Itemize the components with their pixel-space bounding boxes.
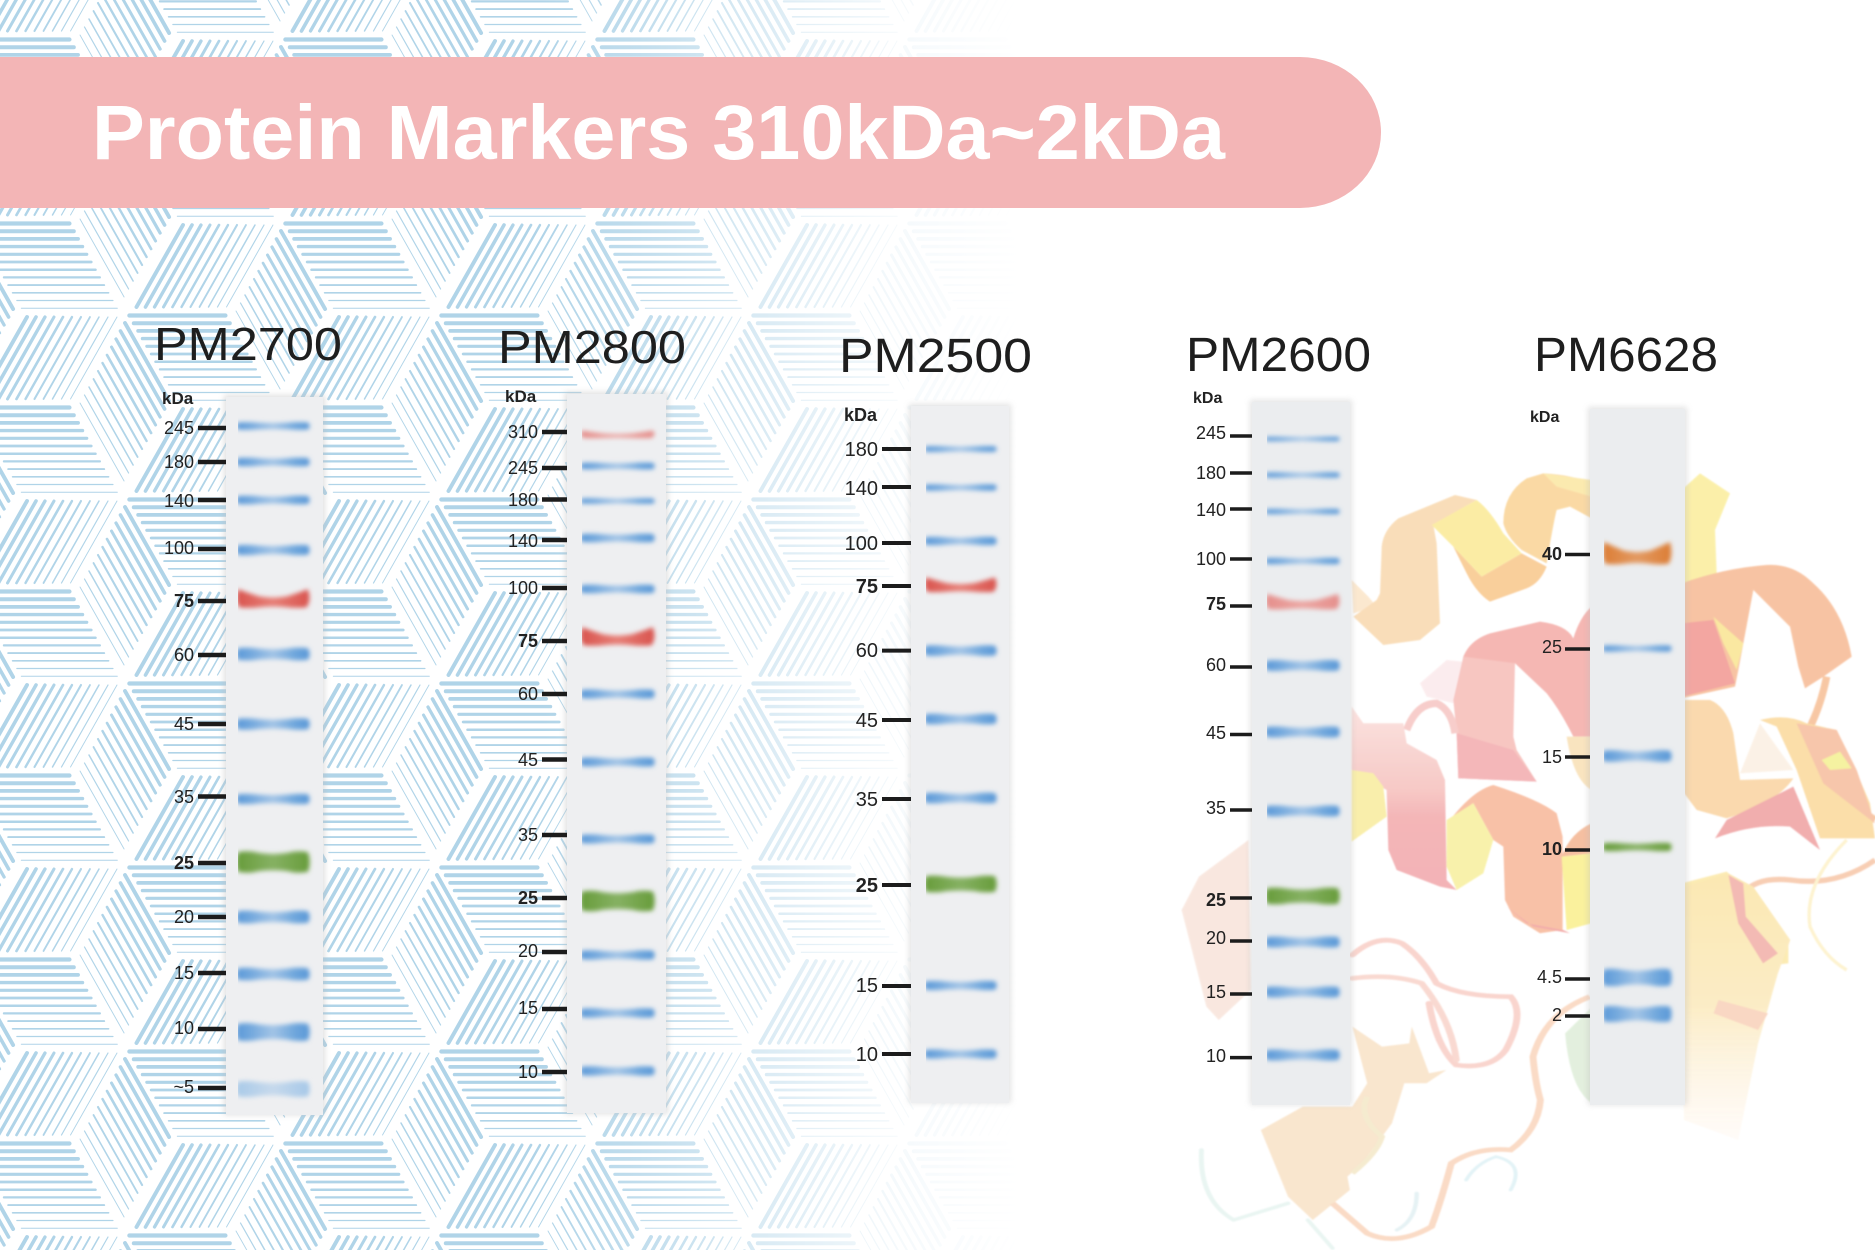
- size labels PM2800: 10: [518, 1062, 538, 1082]
- panel: PM2700 ladder: [154, 318, 342, 1115]
- size labels PM2600: 25: [1206, 890, 1226, 910]
- bands PM2600: [1265, 437, 1340, 1061]
- ribbon: lower section: [1182, 840, 1790, 1248]
- size labels PM2700: 15: [174, 963, 194, 983]
- size labels PM2600: 75: [1206, 594, 1226, 614]
- size labels PM2500: 75: [856, 576, 878, 598]
- protein ribbon illustration: [1182, 473, 1875, 1248]
- size labels PM2500: 60: [856, 640, 878, 662]
- size labels PM2500: kDa: [844, 405, 878, 425]
- gel lane PM2700: [224, 395, 325, 1115]
- panel: PM2800 ladder: [498, 321, 686, 1114]
- ticks PM6628: [1565, 554, 1590, 1016]
- bands PM2500: [924, 446, 997, 1059]
- size labels PM2800: 20: [518, 941, 538, 961]
- size labels PM2700: 140: [164, 491, 194, 511]
- size labels PM2600: 45: [1206, 723, 1226, 743]
- size labels PM2800: 15: [518, 998, 538, 1018]
- size labels PM2600: 20: [1206, 928, 1226, 948]
- size labels PM2800: 60: [518, 684, 538, 704]
- size labels PM2600: 35: [1206, 798, 1226, 818]
- title banner: [0, 57, 1381, 208]
- ticks PM2800: [542, 432, 567, 1072]
- size labels PM6628: kDa: [1530, 409, 1559, 426]
- heading: PM2500: PM2500: [839, 330, 1032, 383]
- size labels PM2500: [844, 405, 878, 1066]
- size labels PM2800: 140: [508, 531, 538, 551]
- size labels PM2800: 45: [518, 750, 538, 770]
- size labels PM6628: 4.5: [1537, 967, 1562, 987]
- heading: PM6628: PM6628: [1534, 329, 1718, 382]
- size labels PM2800: 245: [508, 458, 538, 478]
- size labels PM2700: 60: [174, 645, 194, 665]
- panel: PM2600 ladder: [1186, 329, 1371, 1105]
- size labels PM2500: 10: [856, 1044, 878, 1066]
- ticks PM2600: [1230, 436, 1252, 1058]
- size labels PM2500: 180: [845, 439, 878, 461]
- size labels PM6628: 2: [1552, 1005, 1562, 1025]
- size labels PM2800: 35: [518, 825, 538, 845]
- size labels PM2600: 140: [1196, 500, 1226, 520]
- size labels PM2700: [162, 389, 194, 1097]
- size labels PM2700: 180: [164, 452, 194, 472]
- size labels PM2600: [1193, 390, 1226, 1066]
- size labels PM2700: 35: [174, 787, 194, 807]
- size labels PM2700: 75: [174, 591, 194, 611]
- size labels PM2600: 100: [1196, 549, 1226, 569]
- ticks PM2500: [882, 449, 911, 1054]
- size labels PM2800: kDa: [505, 387, 537, 406]
- size labels PM2700: 100: [164, 538, 194, 558]
- size labels PM6628: 10: [1542, 839, 1562, 859]
- size labels PM2700: ~5: [173, 1077, 194, 1097]
- size labels PM6628: [1530, 409, 1562, 1025]
- bands PM6628: [1602, 542, 1672, 1022]
- panel: PM6628 ladder: [1530, 329, 1718, 1105]
- size labels PM2800: [505, 387, 538, 1082]
- size labels PM2800: 180: [508, 490, 538, 510]
- size labels PM6628: 25: [1542, 637, 1562, 657]
- size labels PM2500: 140: [845, 478, 878, 500]
- heading: PM2700: PM2700: [154, 318, 342, 370]
- gel lane PM2500: [909, 404, 1011, 1103]
- size labels PM6628: 15: [1542, 747, 1562, 767]
- size labels PM2500: 35: [856, 789, 878, 811]
- size labels PM2700: kDa: [162, 389, 194, 408]
- heading: PM2600: PM2600: [1186, 329, 1371, 382]
- size labels PM2800: 100: [508, 578, 538, 598]
- size labels PM2600: kDa: [1193, 390, 1222, 407]
- bands PM2700: [236, 422, 310, 1097]
- panel: PM2500 ladder: [839, 330, 1032, 1103]
- size labels PM2600: 60: [1206, 655, 1226, 675]
- size labels PM2700: 10: [174, 1018, 194, 1038]
- size labels PM2800: 25: [518, 888, 538, 908]
- size labels PM2700: 45: [174, 714, 194, 734]
- bands PM2800: [580, 430, 655, 1076]
- ribbon: upper centre section: [1352, 473, 1592, 933]
- size labels PM6628: 40: [1542, 544, 1562, 564]
- ribbon: right section: [1682, 473, 1875, 970]
- size labels PM2500: 25: [856, 875, 878, 897]
- ticks PM2700: [198, 428, 226, 1088]
- size labels PM2500: 100: [845, 533, 878, 555]
- size labels PM2800: 75: [518, 631, 538, 651]
- size labels PM2700: 245: [164, 418, 194, 438]
- size labels PM2600: 10: [1206, 1046, 1226, 1066]
- size labels PM2700: 25: [174, 853, 194, 873]
- size labels PM2500: 15: [856, 975, 878, 997]
- gel lane PM6628: [1588, 407, 1687, 1105]
- heading: PM2800: PM2800: [498, 321, 686, 373]
- title text: Protein Markers 310kDa~2kDa: [92, 90, 1226, 176]
- size labels PM2600: 245: [1196, 423, 1226, 443]
- size labels PM2700: 20: [174, 907, 194, 927]
- size labels PM2600: 180: [1196, 463, 1226, 483]
- gel lane PM2800: [565, 392, 668, 1114]
- size labels PM2800: 310: [508, 422, 538, 442]
- gel lane PM2600: [1250, 400, 1352, 1105]
- size labels PM2600: 15: [1206, 982, 1226, 1002]
- size labels PM2500: 45: [856, 710, 878, 732]
